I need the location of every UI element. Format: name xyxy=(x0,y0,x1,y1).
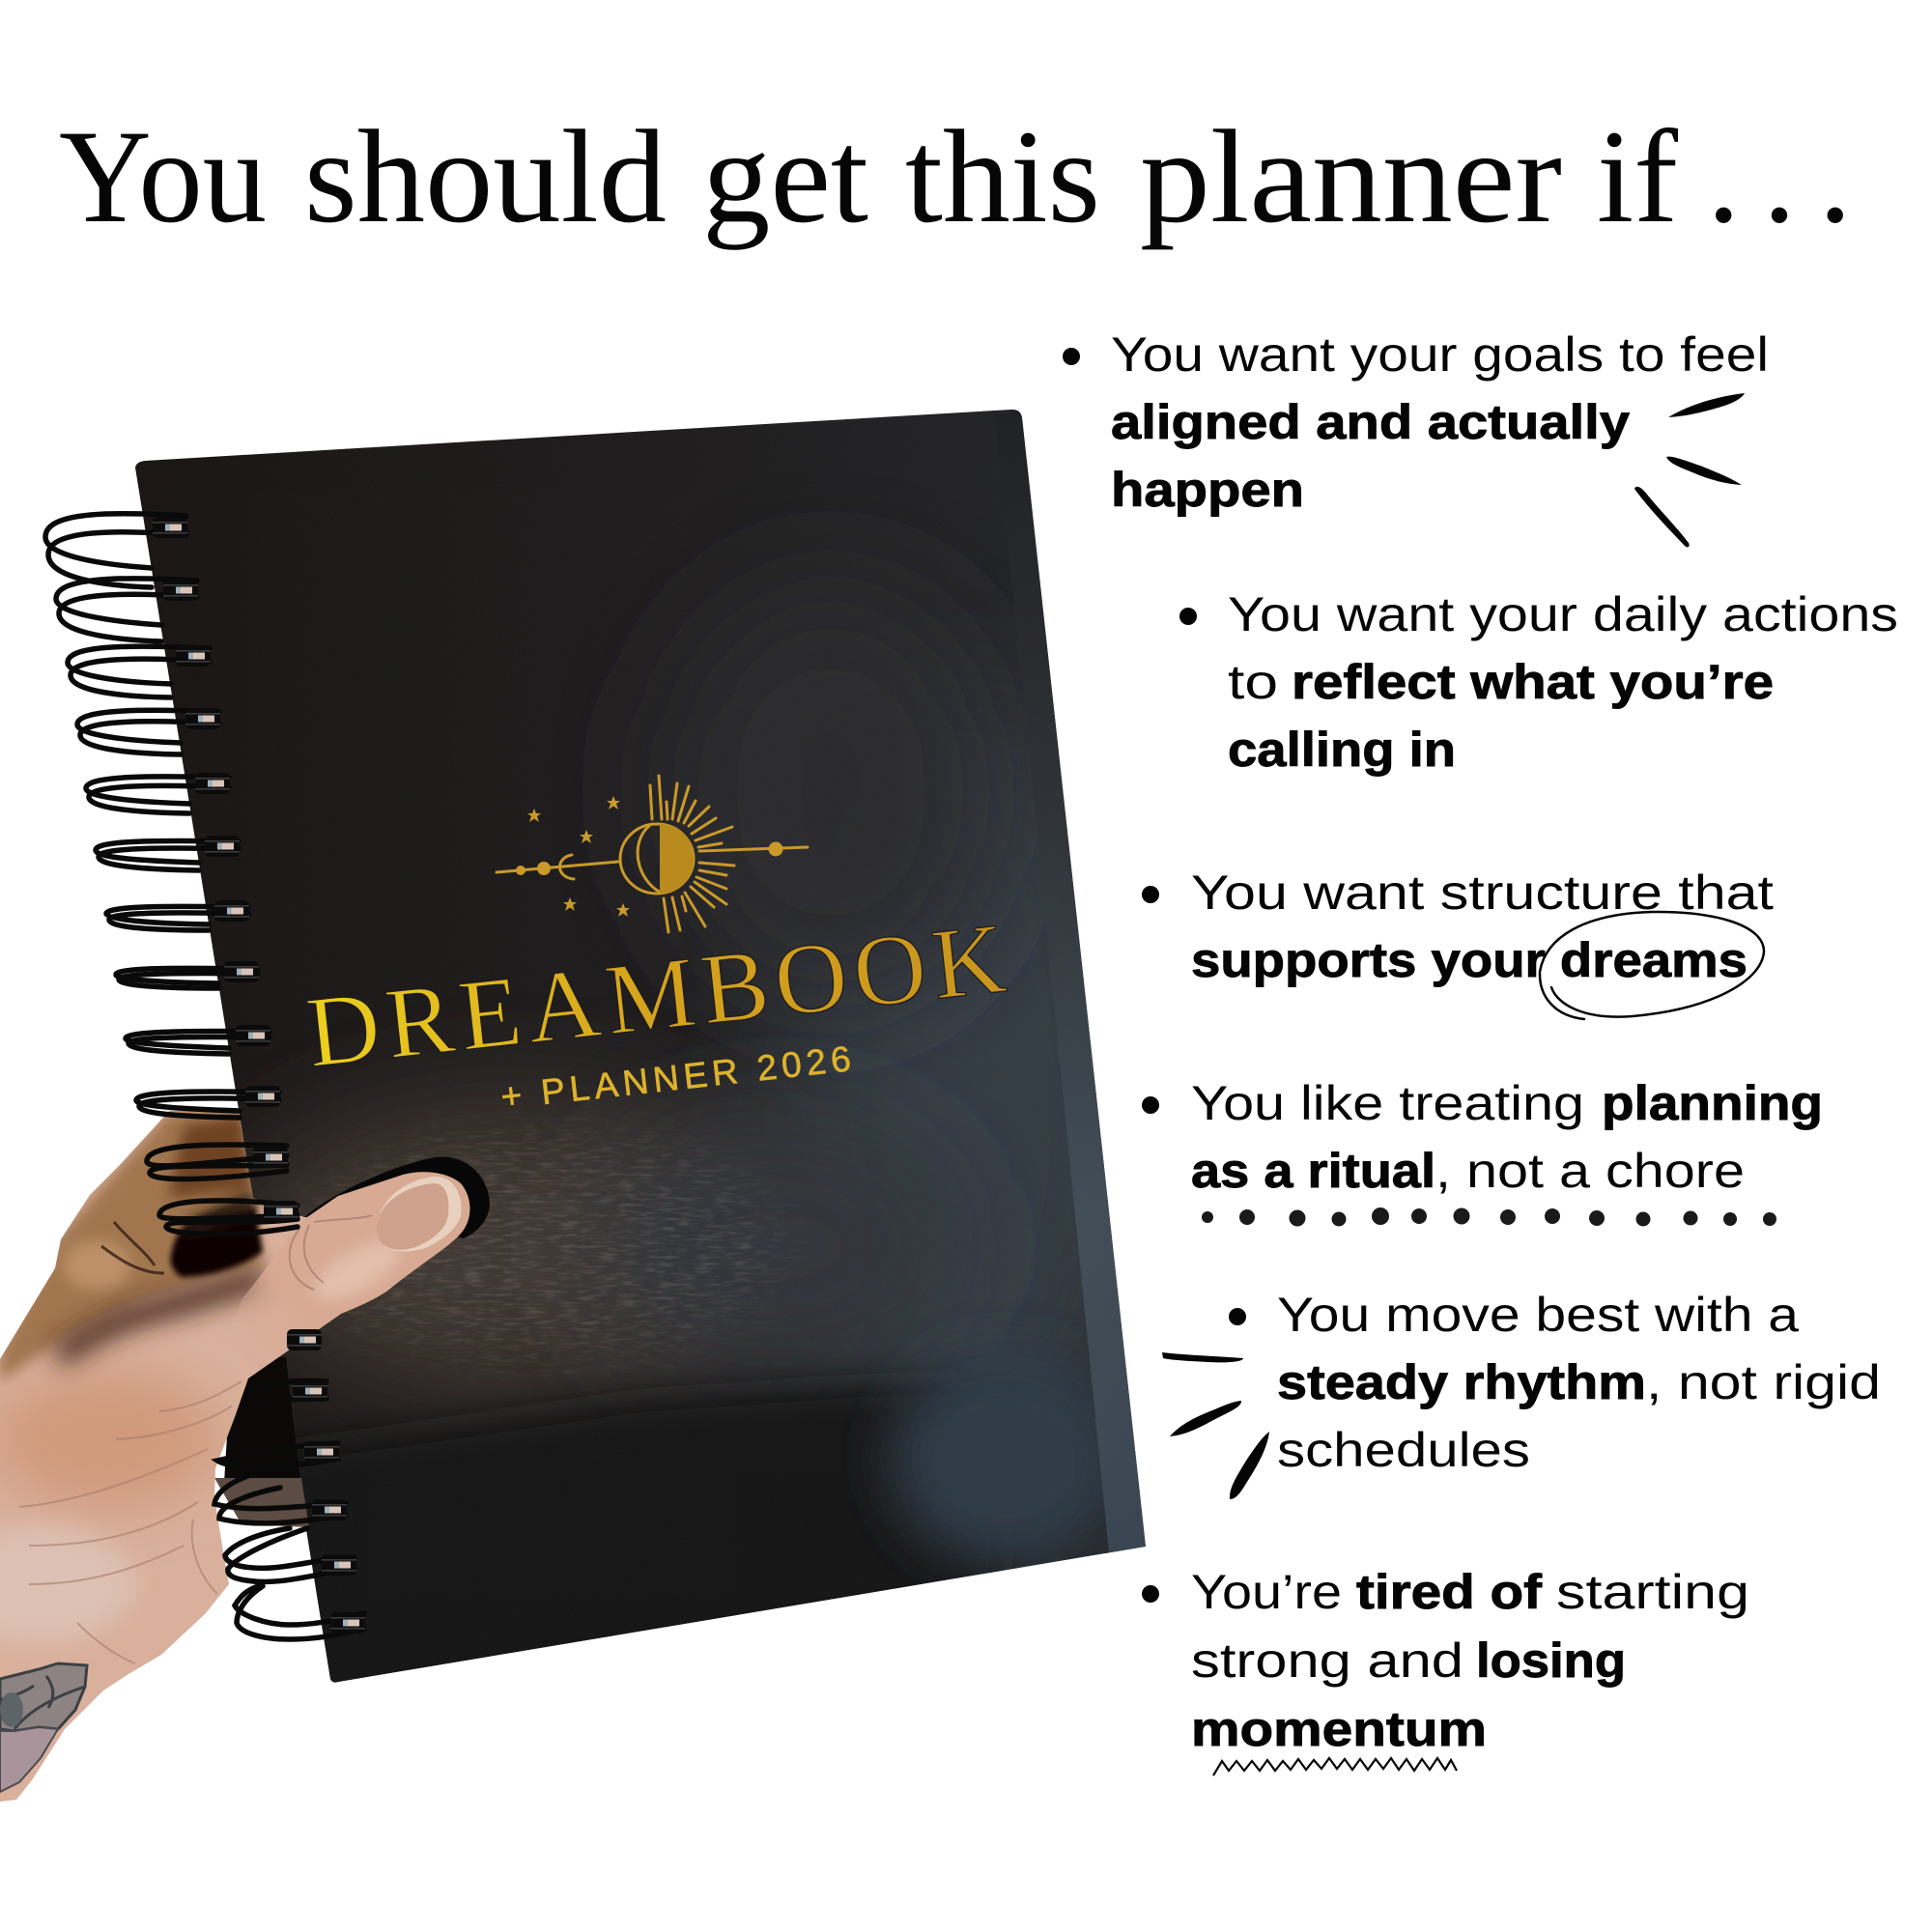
cover subtitle: + PLANNER 2026: + PLANNER 2026 xyxy=(498,1038,853,1117)
checklist item 4: planning ritual xyxy=(1142,1076,1823,1198)
title: planner xyxy=(1140,102,1562,250)
checklist item 5: steady rhythm: schedules xyxy=(1277,1423,1530,1477)
checklist item 2: daily actions: to xyxy=(1228,655,1278,709)
title xyxy=(59,102,1852,250)
checklist item 5: steady rhythm: steady rhythm xyxy=(1277,1355,1646,1409)
title: get xyxy=(702,102,868,250)
checklist item 4: planning ritual: You like treating xyxy=(1191,1076,1584,1130)
checklist item 2: daily actions xyxy=(1179,587,1898,777)
title: if xyxy=(1597,102,1678,250)
checklist item 5: steady rhythm: You move best with a xyxy=(1277,1288,1799,1342)
checklist item 6: momentum: You’re xyxy=(1191,1565,1342,1619)
checklist item 1: goals: happen xyxy=(1111,463,1304,517)
checklist item 6: momentum: losing xyxy=(1476,1634,1626,1688)
checklist item 5: steady rhythm xyxy=(1229,1288,1881,1477)
checklist item 3: structure: You want structure that xyxy=(1191,866,1774,920)
title: . . . xyxy=(1707,102,1852,250)
planner photo: notebook held in a hand xyxy=(0,396,1159,1816)
checklist item 2: daily actions: You want your daily actions xyxy=(1228,587,1898,641)
checklist item 6: momentum xyxy=(1142,1565,1749,1756)
knuckle folds on thumb xyxy=(290,1215,372,1290)
checklist item 1: goals: aligned and actually xyxy=(1111,395,1630,449)
checklist item 2: daily actions: calling in xyxy=(1228,723,1456,777)
title: You xyxy=(59,102,267,250)
brush accent strokes near item 1 xyxy=(1634,393,1745,547)
knuckle crease lines xyxy=(101,1222,164,1273)
spiral coils behind the hand xyxy=(243,1381,327,1412)
checklist item 6: momentum: starting xyxy=(1556,1565,1749,1619)
dotted accent line under item 4 xyxy=(1202,1208,1776,1227)
hand-drawn circle around "dreams" xyxy=(1540,912,1764,1019)
checklist item 3: structure xyxy=(1142,866,1774,987)
checklist item 5: steady rhythm: , not rigid xyxy=(1646,1355,1881,1409)
checklist item 2: daily actions: reflect what you’re xyxy=(1292,655,1774,709)
checklist item 4: planning ritual: planning xyxy=(1602,1076,1823,1130)
checklist item 3: structure: supports your dreams xyxy=(1191,933,1747,987)
squiggle underline under "momentum" xyxy=(1213,1758,1457,1776)
checklist item 4: planning ritual: , not a chore xyxy=(1435,1144,1745,1198)
book cover xyxy=(116,396,1159,1739)
checklist item 6: momentum: tired of xyxy=(1356,1565,1542,1619)
spiral binding coils xyxy=(45,514,364,1639)
spiral binding pins xyxy=(153,517,365,1634)
checklist item 6: momentum: strong and xyxy=(1191,1634,1463,1688)
thumbnail xyxy=(377,1177,462,1251)
tattoo xyxy=(0,1663,87,1792)
checklist item 1: goals xyxy=(1063,327,1769,517)
thumb xyxy=(222,1172,469,1378)
thumb shadow on cover xyxy=(304,1157,490,1238)
hand xyxy=(0,1101,493,1816)
checklist item 6: momentum: momentum xyxy=(1191,1702,1487,1756)
checklist item 4: planning ritual: as a ritual xyxy=(1191,1144,1435,1198)
title: this xyxy=(905,102,1100,250)
title: should xyxy=(304,102,667,250)
shadowed gap between hand and book xyxy=(214,1357,309,1527)
gold emblem: sun, moon and stars xyxy=(497,776,808,932)
checklist item 1: goals: You want your goals to feel xyxy=(1111,327,1769,382)
brush accent strokes near item 5 xyxy=(1162,1352,1269,1499)
palm wrinkles xyxy=(19,1381,242,1663)
cover title: DREAMBOOK: DREAMBOOK xyxy=(301,902,1010,1089)
